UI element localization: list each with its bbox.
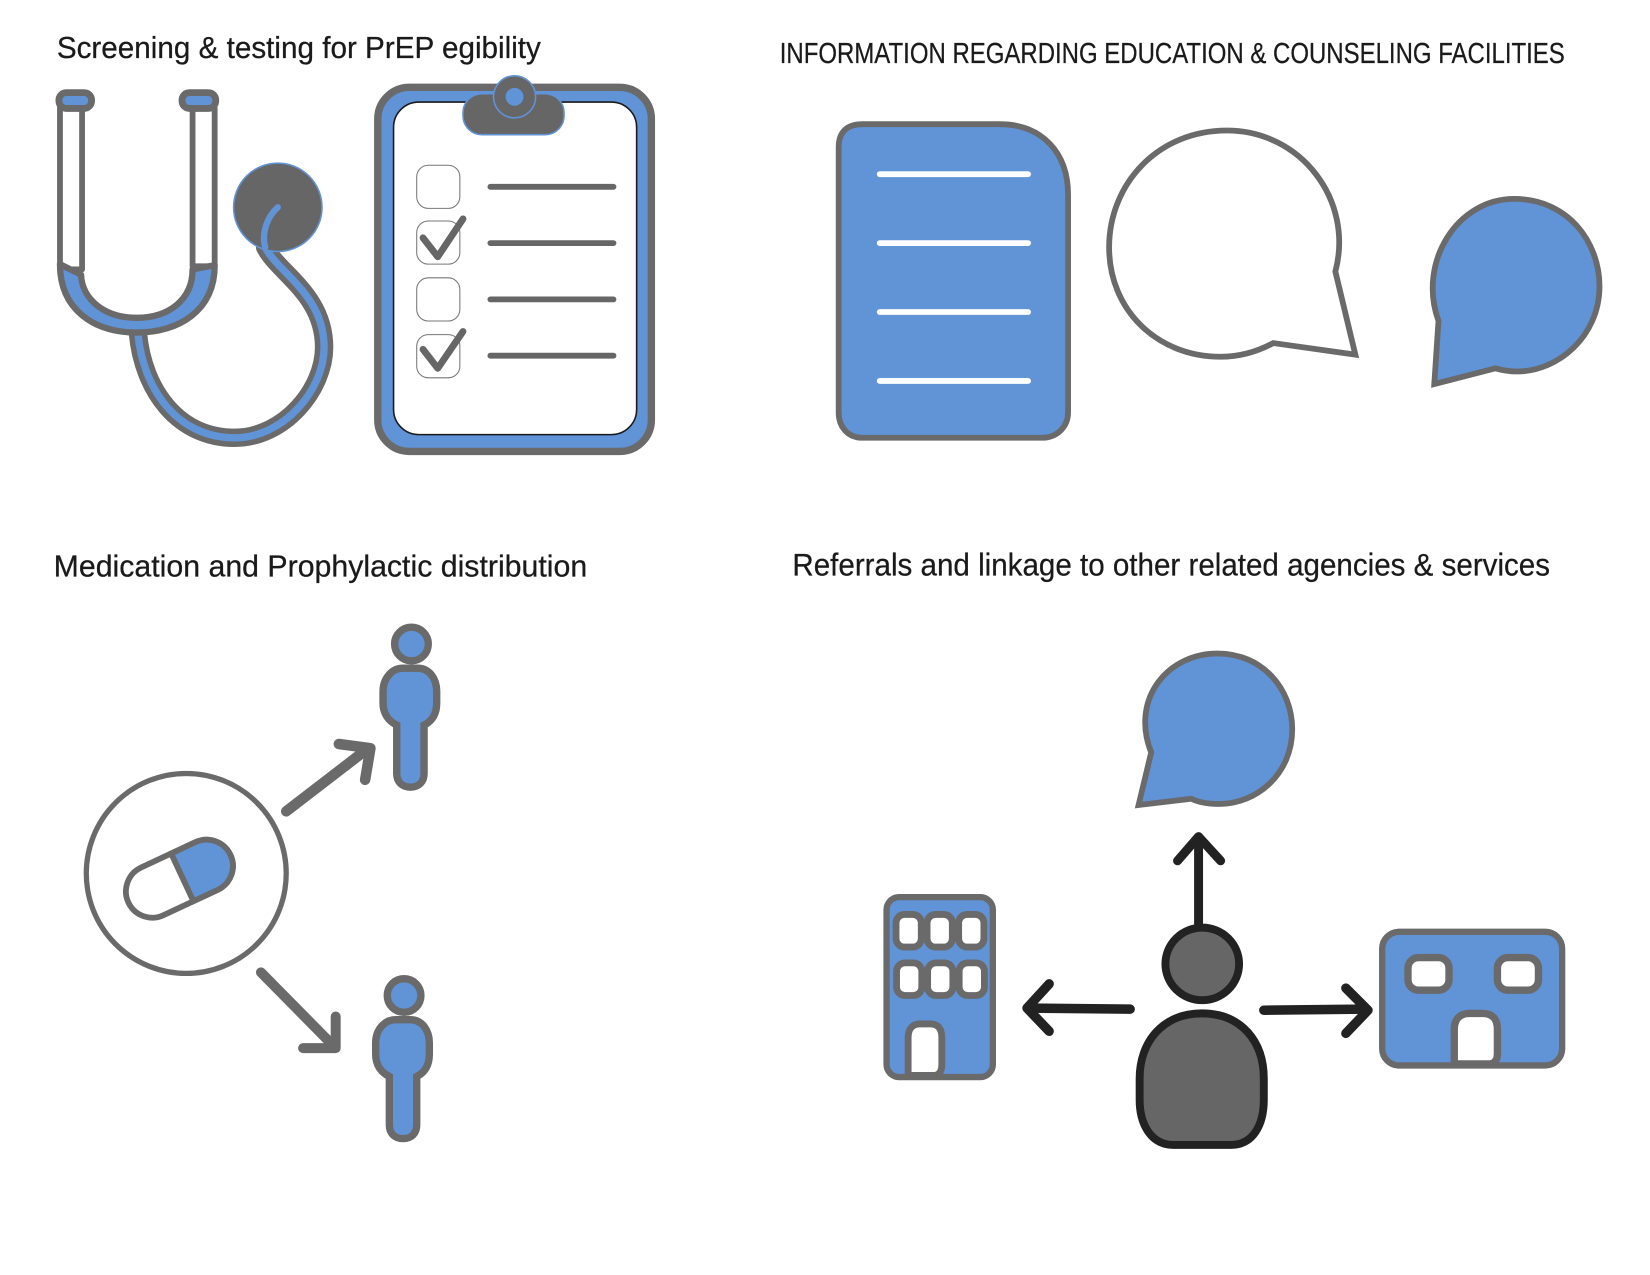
left ear tube	[60, 106, 82, 269]
panel: medication distribution	[54, 550, 587, 1139]
clipboard paper	[394, 102, 637, 435]
panel: screening and testing	[57, 31, 651, 451]
stethoscope chest piece	[234, 163, 322, 252]
arrow: to lower person	[261, 972, 336, 1048]
arrow: up	[1178, 837, 1221, 926]
icon: lower person	[376, 979, 429, 1139]
checklist lines	[490, 187, 613, 356]
check marks	[423, 219, 463, 368]
right ear tube	[193, 108, 215, 266]
U-shaped headset	[60, 264, 215, 333]
icon: upper person	[383, 627, 437, 787]
panel: referrals and linkage	[792, 547, 1562, 1145]
arrow: to upper person	[286, 744, 370, 811]
icon: stethoscope	[59, 93, 324, 438]
heading: medication: Medication and Prophylactic distribution	[54, 550, 587, 584]
panel: education and counseling	[780, 38, 1599, 438]
checkboxes	[417, 165, 460, 378]
clipboard board	[378, 87, 651, 451]
arrow: right	[1264, 988, 1368, 1033]
stethoscope tube	[138, 247, 324, 438]
heading: screening: Screening & testing for PrEP egibility	[57, 31, 542, 65]
icon: white speech bubble	[1109, 131, 1355, 357]
arrow: left	[1027, 984, 1130, 1031]
icon: document	[839, 124, 1068, 438]
icon: tall building	[887, 897, 993, 1077]
left ear tip	[59, 93, 92, 108]
heading: referrals: Referrals and linkage to other related agencies & services	[792, 547, 1550, 583]
clipboard clip	[463, 76, 564, 135]
icon: clipboard checklist	[378, 76, 651, 451]
right ear tip	[182, 93, 216, 108]
icon: speech bubble	[1139, 653, 1292, 805]
icon: blue speech bubble	[1433, 199, 1599, 384]
icon: central person	[1140, 928, 1264, 1145]
icon: pill in circle	[86, 773, 286, 973]
icon: wide building	[1382, 932, 1562, 1065]
